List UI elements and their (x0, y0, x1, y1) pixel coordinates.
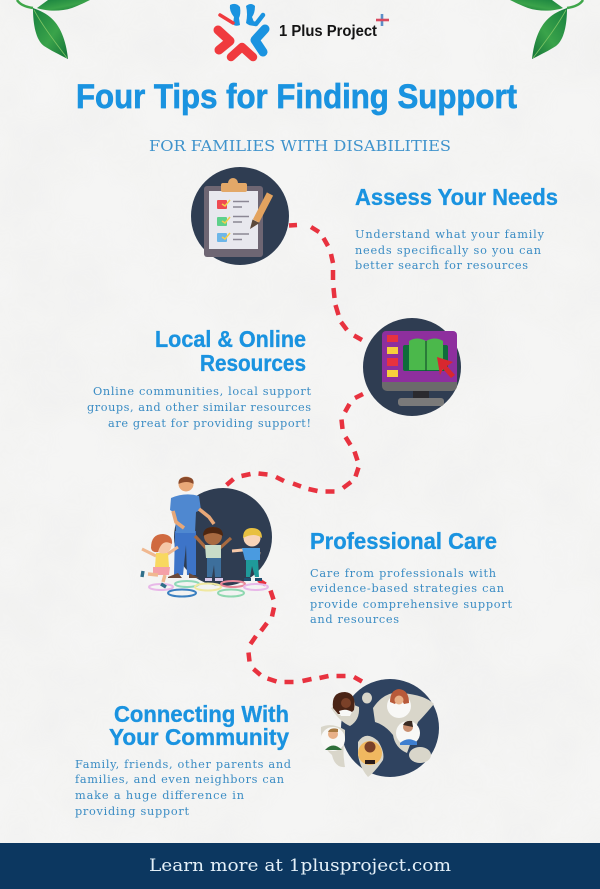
tip 2 text: are great for providing support! (108, 417, 311, 430)
land masses (321, 692, 434, 777)
footer banner: Learn more at 1plusproject.com (149, 856, 451, 875)
tip 2 text: groups, and other similar resources (87, 401, 311, 414)
tip 3 text: provide comprehensive support (310, 598, 512, 611)
decoration: top left leaves (17, 0, 90, 59)
tip 3 text (310, 567, 512, 626)
illustration: globe with connected people (321, 679, 439, 777)
tip 4 text: Family, friends, other parents and (75, 758, 291, 771)
subtitle: FOR FAMILIES WITH DISABILITIES (149, 139, 451, 155)
tip 3 text: and resources (310, 613, 399, 626)
adult carer (168, 476, 214, 578)
icon: clipboard checklist (191, 167, 289, 265)
illustration: professional with children (142, 476, 272, 596)
tip 1 text: Understand what your family (355, 228, 545, 241)
tip 2 heading (155, 326, 306, 376)
tip 2 text (87, 385, 311, 430)
tip 4 text: families, and even neighbors can (75, 773, 284, 786)
tip 4 heading: Connecting With (114, 701, 289, 727)
tip 3 text: evidence-based strategies can (310, 582, 504, 595)
tip 4 heading (109, 701, 289, 750)
tip 2 heading: Local & Online (155, 326, 306, 352)
right child (232, 528, 262, 581)
tip 3 heading: Professional Care (310, 528, 497, 554)
tip 4 text: make a huge difference in (75, 789, 244, 802)
person portraits (321, 689, 420, 765)
logo: 1 Plus Project (218, 4, 389, 57)
dashed connector: tip 1 to tip 2 (289, 225, 362, 340)
girl (142, 534, 178, 587)
tip 3 text: Care from professionals with (310, 567, 496, 580)
tip 1 text: better search for resources (355, 259, 528, 272)
tip 1 heading: Assess Your Needs (355, 184, 558, 210)
dashed connector: tip 3 to tip 4 (248, 580, 362, 682)
logo: 1 Plus Project: 1 Plus Project (279, 23, 378, 40)
tip 4 text: providing support (75, 805, 189, 818)
dashed connector: tip 2 to tip 3 (226, 394, 363, 492)
tip 2 text: Online communities, local support (93, 385, 311, 398)
icon: computer with book (363, 318, 461, 416)
decoration: top right leaves (510, 0, 583, 59)
footer banner (0, 843, 600, 889)
title: Four Tips for Finding Support (76, 78, 517, 116)
hoop rings (149, 581, 268, 596)
tip 4 heading: Your Community (109, 724, 289, 750)
tip 2 heading: Resources (200, 350, 306, 376)
tip 1 text (355, 228, 545, 272)
tip 1 text: needs specifically so you can (355, 244, 541, 257)
middle child (195, 527, 231, 581)
tip 4 text (75, 758, 291, 818)
